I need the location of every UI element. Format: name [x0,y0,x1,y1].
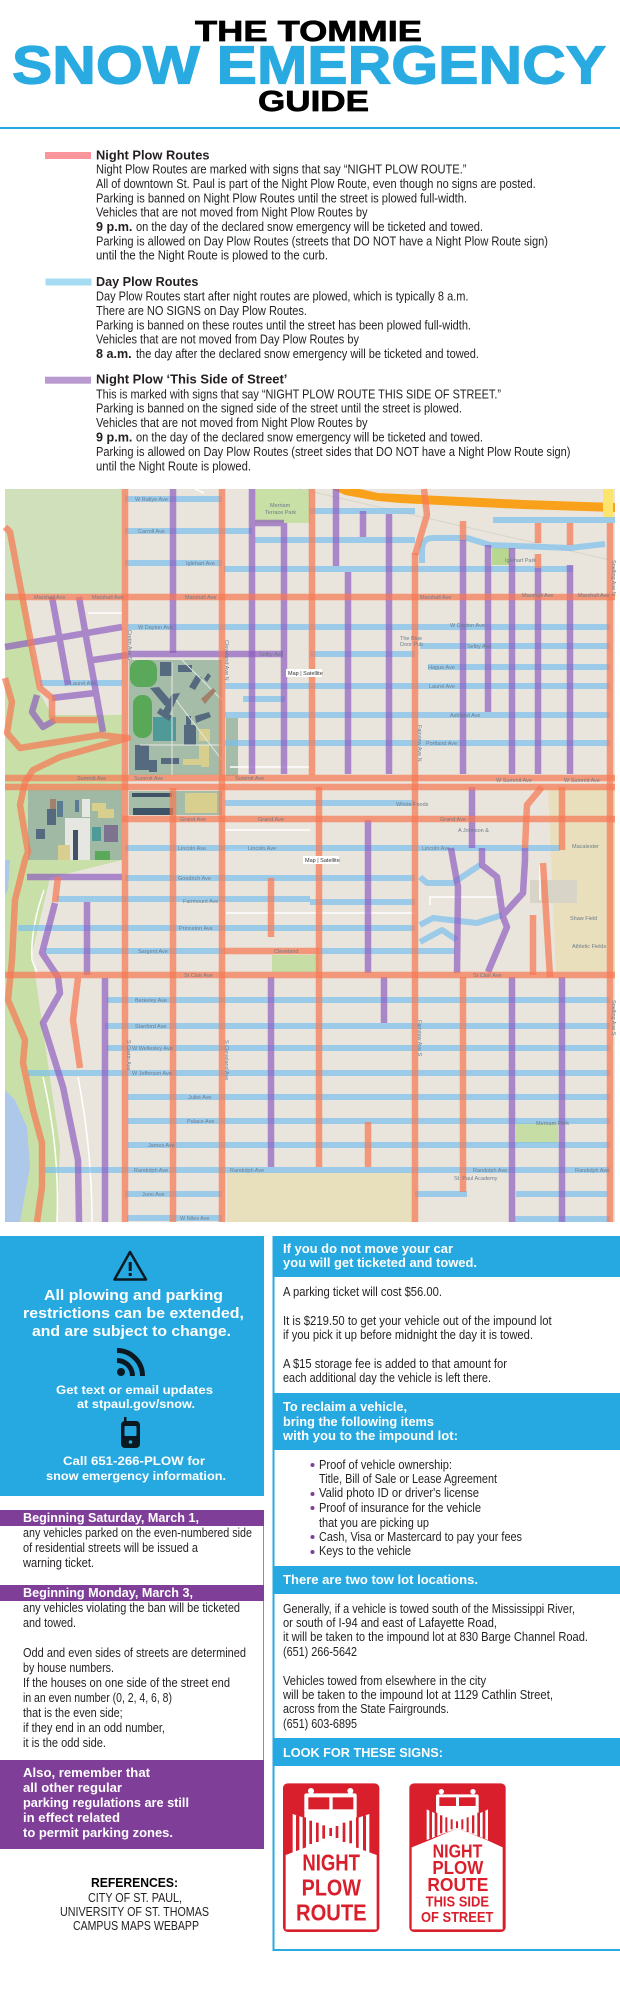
map: street labels: Goodrich Ave [178,876,211,882]
map: street labels: W Ratlye Ave [135,497,168,503]
legend: night plow this side of street: 9 p.m. [96,430,132,444]
callout: permit parking: Also, remember that [23,1766,151,1780]
heading: reclaim a vehicle: To reclaim a vehicle, [283,1400,407,1414]
map of plow routes [5,489,616,1222]
map: street labels: Fairmount Ave [183,899,218,905]
map: street labels: Ashland Ave [450,713,480,719]
map: street labels: Marshall Ave [420,595,451,601]
text: ticketed and towed, odd and even: in an even number (0, 2, 4, 6, 8) [23,1690,172,1705]
map: street labels: Laurel Ave [70,681,96,687]
list: items to bring: Proof of insurance for the vehicle [319,1500,481,1515]
map: street labels: W Jefferson Ave [132,1071,172,1077]
map: street labels: Selby Ave [259,652,283,658]
text: costs: A $15 storage fee is added to that amount for [283,1356,508,1371]
text: tow lots [282,1601,588,1731]
callout: permit parking [0,1760,264,1849]
map: street labels: Whole Foods [396,802,429,808]
map: street labels: Carroll Ave [138,529,165,535]
text: ticketed and towed, odd and even: any vehicles violating the ban will be ticketed [23,1600,240,1615]
legend: day plow routes: Vehicles that are not moved from Day Plow Routes by [96,333,360,347]
updates text [56,1383,213,1411]
map: street labels: Door Pub [400,642,423,648]
map white side streets [32,489,610,1222]
map: street labels: Laurel Ave [429,684,455,690]
map: street labels: Grand Ave [180,817,206,823]
list: items to bring [310,1457,522,1558]
map controls: Map | Satellite [305,858,340,864]
text: costs: A parking ticket will cost $56.00. [283,1284,442,1299]
map: street labels: The Blue [400,636,422,642]
map: street labels: Stanford Ave [135,1024,166,1030]
map: street labels: Cretin Ave S [126,630,132,661]
heading: Monday March 3: Beginning Monday, March 3, [23,1586,193,1600]
map: street labels: W Dayton Ave [138,625,173,631]
map: street labels: W Wellesley Ave [132,1046,173,1052]
map: street labels: Snelling Ave S [610,1000,616,1036]
legend: night plow this side of street: Parking is banned on the signed side of the street until the street is plowed. [96,402,462,416]
text: costs: It is $219.50 to get your vehicle out of the impound lot [283,1313,552,1328]
sign: night plow route this side of street: NIGHT [433,1840,483,1861]
text: warning ticket: of residential streets will be issued a [23,1540,199,1555]
list: items to bring: Proof of vehicle ownership: [319,1457,452,1472]
map highway [332,489,615,518]
legend: day plow routes: Parking is banned on these routes until the street has been plowed full-width. [96,318,471,332]
heading: tow lot locations [272,1566,620,1594]
text: costs: each additional day the vehicle is left there. [283,1370,491,1385]
legend: night plow routes: Vehicles that are not moved from Night Plow Routes by [96,206,368,220]
heading: Saturday March 1: Beginning Saturday, March 1, [23,1511,199,1525]
text: tow lots: (651) 603-6895 [283,1716,357,1731]
map: street labels: Lincoln Ave [422,846,450,852]
legend: night plow this side of street: This is marked with signs that say “NIGHT PLOW ROUTE THIS SIDE OF STREET.” [96,387,501,401]
text: ticketed and towed, odd and even: If the houses on one side of the street end [23,1675,230,1690]
list: items to bring: that you are picking up [319,1515,429,1530]
legend: night plow this side of street: Parking is allowed on Day Plow Routes (street sides that DO NOT have a Night Plow Route sign) [96,445,570,459]
map: street labels: Juliet Ave [188,1095,211,1101]
map: street labels: Lincoln Ave [248,846,276,852]
map: street labels: S Cleveland Ave [223,1040,229,1080]
heading: Monday March 3 [0,1585,264,1601]
map: street labels: St Clair Ave [473,973,502,979]
references: REFERENCES: [91,1876,178,1890]
references [60,1876,209,1933]
heading: ticketed and towed: you will get ticketed and towed. [283,1256,477,1270]
sign: night plow route this side of street: OF STREET [421,1910,494,1926]
map: street labels: Princeton Ave [179,926,213,932]
sign: night plow route [283,1783,379,1932]
sign: night plow route this side of street: ROUTE [427,1874,488,1895]
map: street labels: A Johnson & [458,828,489,834]
panel: ticket, reclaim, tow lots, signs [272,1236,620,1951]
warning text: All plowing and parking [44,1287,223,1304]
legend: night plow this side of street: Night Plow ‘This Side of Street’ [96,373,287,387]
call text [46,1454,226,1483]
map: street labels: Marshall Ave [92,595,123,601]
map: street labels: St. Paul Academy [454,1176,498,1182]
map: street labels: Selby Ave [467,644,491,650]
map: street labels: W Dayton Ave [450,623,485,629]
legend: night plow this side of street: until the Night Route is plowed. [96,459,251,473]
list: items to bring: Valid photo ID or driver's license [319,1485,479,1500]
map: street labels: Fairview Ave N [416,725,422,762]
panel: warning and updates [0,1236,264,1496]
map: street labels: W Summit Ave [496,778,532,784]
map: street labels: Iglehart Ave [186,561,215,567]
map: street labels: Juno Ave [142,1192,165,1198]
references: CAMPUS MAPS WEBAPP [73,1918,199,1933]
references: CITY OF ST. PAUL, [88,1890,182,1905]
text: ticketed and towed, odd and even: that is the even side; [23,1705,123,1720]
text: costs: if you pick it up before midnight the day it is towed. [283,1327,533,1342]
map: street labels: Summit Ave [235,776,264,782]
list: items to bring: Title, Bill of Sale or Lease Agreement [319,1471,497,1486]
map controls [286,669,340,864]
warning text: restrictions can be extended, [23,1305,244,1322]
legend: day plow routes: Day Plow Routes start after night routes are plowed, which is typically 8 a.m. [96,290,468,304]
legend: night plow this side of street: Vehicles that are not moved from Night Plow Routes by [96,416,368,430]
call text: snow emergency information. [46,1469,226,1483]
map: street labels: Grand Ave [258,817,284,823]
legend: day plow routes: There are NO SIGNS on Day Plow Routes. [96,304,307,318]
legend: day plow routes: 8 a.m. [96,347,132,361]
map: street labels: St Clair Ave [184,973,213,979]
map: university south campus [28,790,222,860]
callout: permit parking: all other regular [23,1781,122,1795]
text: warning ticket: any vehicles parked on the even-numbered side [23,1525,252,1540]
heading: look for these signs: LOOK FOR THESE SIGNS: [283,1746,443,1760]
callout: permit parking: parking regulations are still [23,1796,189,1810]
icon: phone [121,1417,140,1448]
map: street labels: Marshall Ave [185,595,216,601]
updates text: Get text or email updates [56,1383,213,1397]
heading: Saturday March 1 [0,1510,264,1526]
legend: day plow routes [46,275,479,361]
map: street labels: Cleveland Ave N [223,640,229,681]
map: street labels: Fairview Ave S [416,1020,422,1057]
map: street labels: Merriam [270,503,291,509]
map: street labels: Sargent Ave [138,949,168,955]
map: street labels: Terrace Park [265,510,296,516]
legend: night plow routes: All of downtown St. Paul is part of the Night Plow Route, even though no signs are posted. [96,177,536,191]
map: street labels: Randolph Ave [575,1168,609,1174]
sign: night plow route: ROUTE [296,1900,367,1926]
legend: night plow this side of street [45,373,570,473]
title: THE TOMMIE [195,16,422,48]
text: ticketed and towed, odd and even: Odd and even sides of streets are determined [23,1645,246,1660]
legend: night plow routes: on the day of the declared snow emergency will be ticketed and towed. [136,220,483,234]
legend: night plow routes: Night Plow Routes [96,148,210,162]
references: UNIVERSITY OF ST. THOMAS [60,1904,209,1919]
legend: night plow routes: until the the Night Route is plowed to the curb. [96,249,328,263]
list: items to bring: Cash, Visa or Mastercard to pay your fees [319,1529,522,1544]
map: street labels: Grand Ave [440,817,466,823]
map: street labels: Iglehart Park [505,558,536,564]
heading: ticketed and towed: If you do not move your car [283,1242,453,1256]
sign: night plow route: PLOW [302,1875,361,1901]
map: street labels: Merriam Park [536,1121,569,1127]
map: street labels: Berkeley Ave [135,998,167,1004]
sign: night plow route this side of street [409,1783,506,1932]
text: warning ticket [22,1525,252,1570]
text: ticketed and towed, odd and even: if they end in an odd number, [23,1720,165,1735]
map: street labels: Hague Ave [428,665,455,671]
title: GUIDE [258,86,369,118]
map: street labels: S Cretin Ave [125,1040,131,1070]
legend: night plow routes: Parking is banned on Night Plow Routes until the street is plowed full-width. [96,191,467,205]
map: street labels [34,497,616,1222]
map: day plow routes (blue) [18,499,615,1219]
heading: look for these signs [272,1738,620,1766]
sign: night plow route this side of street: THIS SIDE [426,1895,489,1911]
call text: Call 651-266-PLOW for [63,1454,205,1468]
heading: reclaim a vehicle: bring the following items [283,1415,434,1429]
text: tow lots: across from the State Fairgrounds. [283,1701,449,1716]
text: costs [283,1284,552,1385]
map: street labels: Snelling Ave N [610,560,616,596]
heading: reclaim a vehicle: with you to the impound lot: [282,1429,458,1443]
legend: night plow routes: 9 p.m. [96,220,132,234]
map: street labels: Shaw Field [570,916,597,922]
legend: night plow routes: Night Plow Routes are marked with signs that say “NIGHT PLOW ROUTE.” [96,163,466,177]
map: street labels: Randolph Ave [230,1168,264,1174]
title [12,16,606,118]
map: night plow this side of street routes (purple) [5,489,570,1222]
legend: day plow routes: Day Plow Routes [96,275,198,289]
list: items to bring: Keys to the vehicle [319,1543,411,1558]
sign: night plow route this side of street: PLOW [432,1857,484,1878]
map: street labels: James Ave [148,1143,175,1149]
callout: permit parking: in effect related [23,1811,120,1825]
text: tow lots: or south of I-94 and east of Lafayette Road, [283,1615,497,1630]
map: street labels: Portland Ave [426,741,457,747]
map: street labels: Summit Ave [134,776,163,782]
text: ticketed and towed, odd and even: by house numbers. [23,1660,114,1675]
map: street labels: Macalester [572,844,599,850]
text: ticketed and towed, odd and even: it is the odd side. [23,1735,106,1750]
map: street labels: Marshall Ave [522,593,553,599]
map base [5,489,615,1222]
map: street labels: Marshall Ave [578,593,609,599]
heading: ticketed and towed [272,1236,620,1277]
map parks and river [5,489,615,1222]
map: street labels: Lincoln Ave [178,846,206,852]
map: university north campus [129,660,222,775]
map: night plow routes (red) [5,489,615,1222]
text: tow lots: will be taken to the impound lot at 1129 Cathlin Street, [282,1687,553,1702]
text: ticketed and towed, odd and even: and towed. [23,1615,76,1630]
map: street labels: Randolph Ave [473,1168,507,1174]
panel: parking ban dates [0,1510,264,1849]
icon: warning triangle [114,1252,146,1280]
title: SNOW EMERGENCY [12,36,606,96]
text: warning ticket: warning ticket. [22,1555,94,1570]
map: street labels: Randolph Ave [134,1168,168,1174]
map: street labels: Cleveland [274,949,298,955]
map: street labels: W Summit Ave [564,778,600,784]
map: street labels: Summit Ave [77,776,106,782]
map controls: Map | Satellite [288,671,323,677]
text: ticketed and towed, odd and even [23,1600,246,1750]
map: street labels: W Niles Ave [180,1216,210,1222]
updates text: at stpaul.gov/snow. [77,1397,195,1411]
heading: tow lot locations: There are two tow lot locations. [283,1573,478,1587]
sign: night plow route: NIGHT [302,1850,360,1876]
text: tow lots: Vehicles towed from elsewhere in the city [283,1673,486,1688]
legend: night plow this side of street: on the day of the declared snow emergency will be ticketed and towed. [136,430,483,444]
map: street labels: Athletic Fields [572,944,606,950]
callout: permit parking: to permit parking zones. [23,1826,173,1840]
icon: rss feed [117,1350,142,1376]
warning text: and are subject to change. [32,1323,231,1340]
warning text [23,1287,244,1340]
heading: reclaim a vehicle [272,1393,620,1450]
map: street labels: Palace Ave [187,1119,214,1125]
text: tow lots: (651) 266-5642 [283,1644,357,1659]
legend: night plow routes [45,148,548,263]
legend: night plow routes: Parking is allowed on Day Plow Routes (streets that DO NOT have a Night Plow Route sign) [96,234,548,248]
legend: day plow routes: the day after the declared snow emergency will be ticketed and towed. [136,347,479,361]
map: street labels: Marshall Ave [34,595,65,601]
